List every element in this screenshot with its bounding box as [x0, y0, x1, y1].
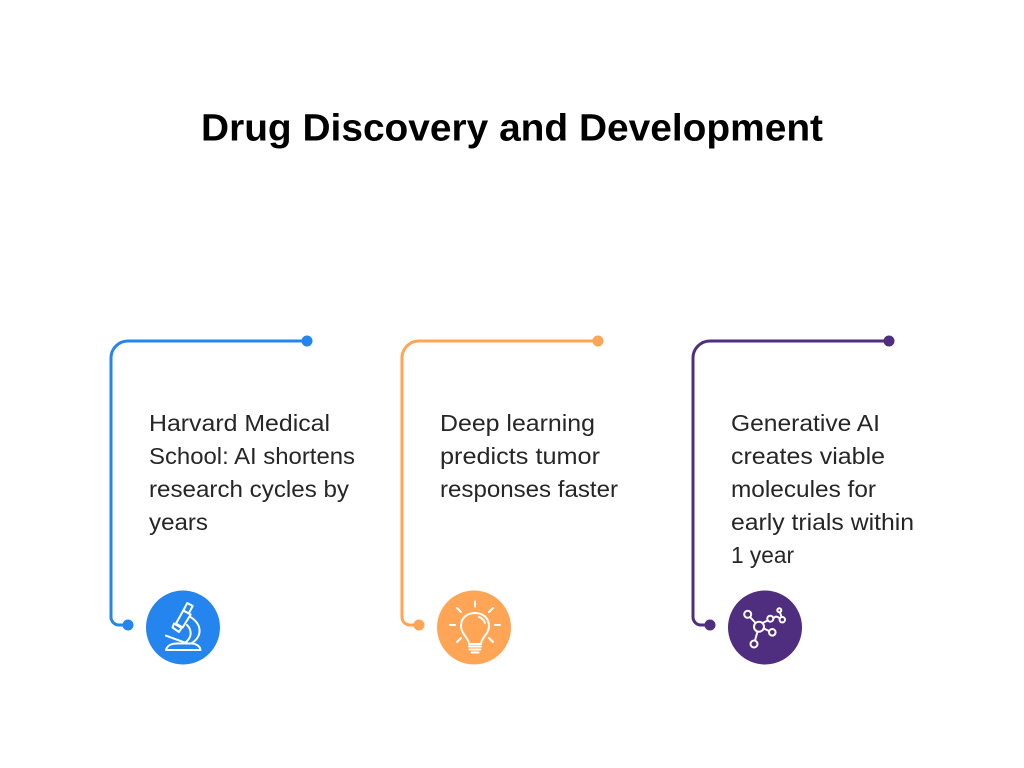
text block: Harvard: Harvard Medical [149, 410, 330, 436]
connector: blue [111, 336, 312, 630]
text block: deep learning: predicts tumor [440, 443, 600, 469]
panel: deep learning [402, 336, 618, 664]
icon: molecule network [728, 590, 802, 664]
text block: deep learning: responses faster [440, 476, 618, 502]
panel: Harvard research cycles [111, 336, 362, 664]
text block: Harvard: School: AI shortens [149, 443, 355, 469]
text block: generative AI: early trials within [731, 509, 914, 535]
text block: generative AI: Generative AI [731, 410, 880, 436]
connector: purple [693, 336, 894, 630]
text block: generative AI: creates viable [731, 443, 885, 469]
icon: microscope [146, 590, 220, 664]
panel: generative AI [693, 336, 921, 664]
text block: Harvard: years [149, 509, 208, 535]
title: Drug Discovery and Development [201, 108, 823, 150]
icon: light bulb [437, 590, 511, 664]
text block: generative AI: 1 year [731, 542, 794, 568]
text block: Harvard: research cycles by [149, 476, 349, 502]
text block: generative AI: molecules for [731, 476, 876, 502]
text block: deep learning: Deep learning [440, 410, 595, 436]
connector: orange [402, 336, 604, 630]
